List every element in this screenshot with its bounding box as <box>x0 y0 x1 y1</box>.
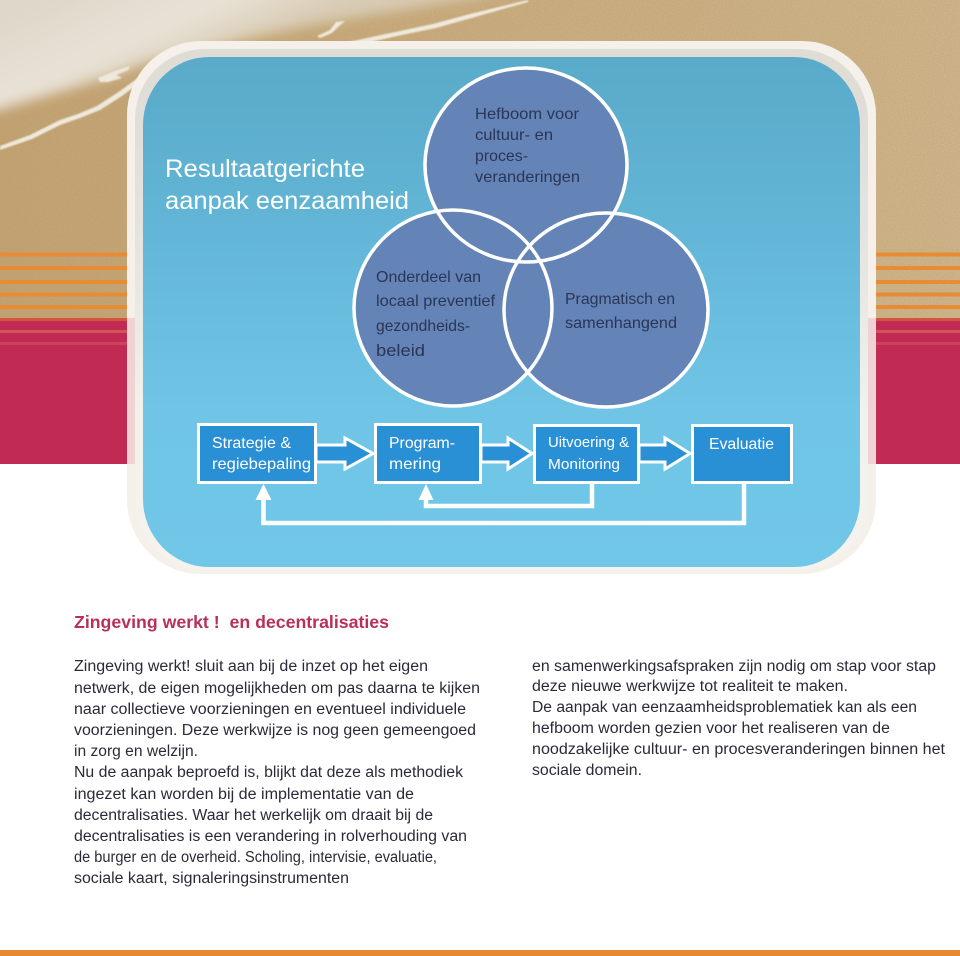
text: left circle: locaal preventief <box>376 293 496 310</box>
box: strategie: regiebepaling <box>212 456 311 473</box>
text block: right column <box>532 658 946 779</box>
white lower page strip under the photo <box>0 464 960 950</box>
panel: blue background <box>143 57 860 567</box>
text block: left column <box>74 658 480 887</box>
box: programmering: mering <box>389 456 441 473</box>
arrow: programmering to uitvoering <box>481 438 532 469</box>
text block: left column: Nu de aanpak beproefd is, blijkt dat deze als methodiek <box>74 764 463 781</box>
process flow <box>198 424 792 523</box>
feedback arrow: evaluatie to strategie <box>256 484 744 523</box>
text block: right column: noodzakelijke cultuur- en procesveranderingen binnen het <box>532 741 946 758</box>
arrow: uitvoering to evaluatie <box>639 438 690 469</box>
text block: right column: sociale domein. <box>532 762 642 779</box>
venn diagram <box>354 68 708 407</box>
text block: left column: voorzieningen. Deze werkwijze is nog geen gemeengoed <box>74 722 476 739</box>
circle: top <box>425 68 627 262</box>
text: right circle: Pragmatisch en <box>565 291 675 308</box>
box: evaluatie <box>692 426 792 482</box>
heading: Zingeving werkt ! en decentralisaties <box>74 612 389 632</box>
title: Resultaatgerichte <box>165 155 365 183</box>
text block: left column: netwerk, de eigen mogelijkheden om pas daarna te kijken <box>74 680 480 697</box>
box: evaluatie: Evaluatie <box>709 436 774 453</box>
orange stripes left and right <box>0 252 960 309</box>
text: left circle <box>376 269 496 360</box>
circle: right <box>504 213 708 407</box>
box: uitvoering: Uitvoering & <box>548 434 629 451</box>
text block: left column: sociale kaart, signaleringsinstrumenten <box>74 870 349 887</box>
box: strategie: Strategie & <box>212 435 291 452</box>
text: right circle <box>565 291 677 332</box>
text block: left column: ingezet kan worden bij de implementatie van de <box>74 786 414 803</box>
text block: left column: decentralisaties. Waar het werkelijk om draait bij de <box>74 807 433 824</box>
bottom orange bar <box>0 950 960 956</box>
beach photo background <box>0 0 960 464</box>
box: uitvoering: Monitoring <box>548 456 620 473</box>
panel frame <box>127 41 876 574</box>
crimson band left <box>0 318 128 464</box>
text: left circle: beleid <box>376 341 425 360</box>
text: top circle: Hefboom voor <box>475 106 580 123</box>
text block: left column: naar collectieve voorzieningen en eventueel individuele <box>74 701 466 718</box>
title: aanpak eenzaamheid <box>165 187 409 215</box>
circle: left <box>354 210 552 406</box>
text block: left column: Zingeving werkt! sluit aan bij de inzet op het eigen <box>74 658 428 675</box>
text: left circle: gezondheids- <box>376 318 470 335</box>
text: right circle: samenhangend <box>565 315 677 332</box>
text block: right column: De aanpak van eenzaamheidsproblematiek kan als een <box>532 699 917 716</box>
text block: left column: decentralisaties is een verandering in rolverhouding van <box>74 828 467 845</box>
text block: right column: en samenwerkingsafspraken zijn nodig om stap voor stap <box>532 658 936 675</box>
box: strategie <box>198 424 316 482</box>
text: top circle: cultuur- en <box>475 127 553 144</box>
text block: left column: de burger en de overheid. Scholing, intervisie, evaluatie, <box>74 849 437 866</box>
text: top circle: proces- <box>475 148 528 165</box>
text block: right column: deze nieuwe werkwijze tot realiteit te maken. <box>532 678 848 695</box>
box: uitvoering <box>534 426 638 482</box>
box: programmering: Program- <box>389 435 455 452</box>
title <box>165 155 409 215</box>
text: top circle <box>475 106 580 186</box>
text block: right column: hefboom worden gezien voor het realiseren van de <box>532 720 890 737</box>
arrow: strategie to programmering <box>316 438 373 469</box>
text: top circle: veranderingen <box>475 169 580 186</box>
box: programmering <box>376 424 480 482</box>
circle outlines <box>354 68 708 407</box>
text block: left column: in zorg en welzijn. <box>74 743 198 760</box>
feedback arrow: uitvoering to programmering <box>418 484 592 506</box>
crimson band right <box>876 318 960 464</box>
text: left circle: Onderdeel van <box>376 269 481 286</box>
